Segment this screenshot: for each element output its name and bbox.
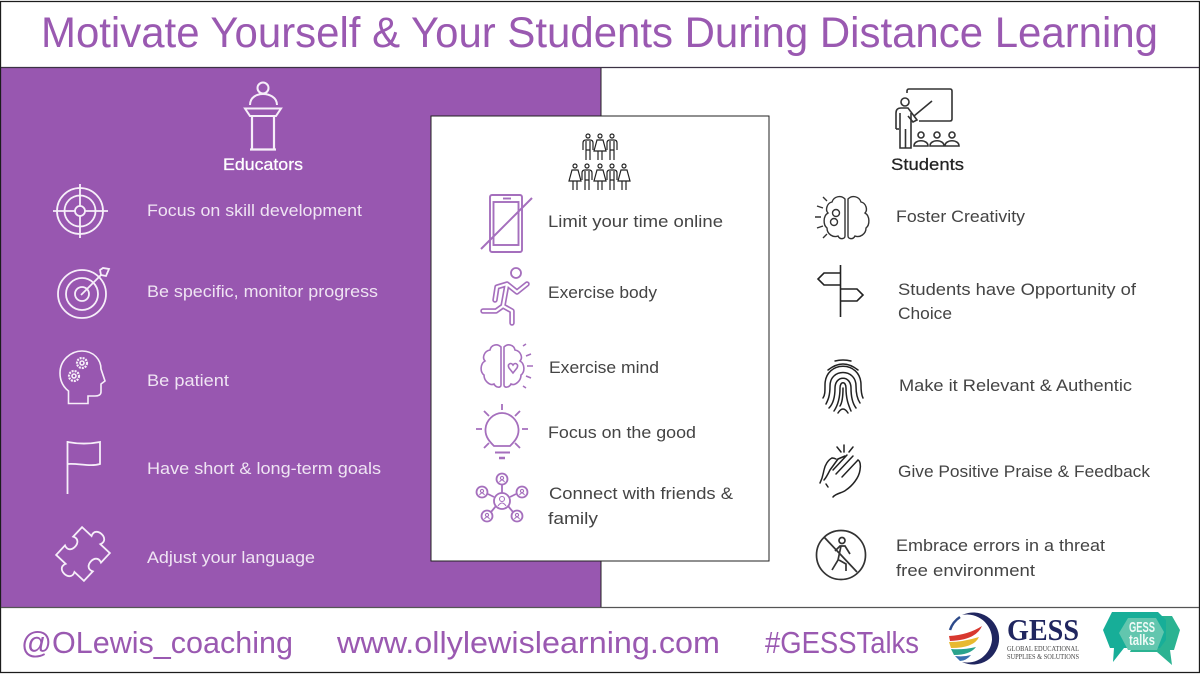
title: Motivate Yourself & Your Students During Distance Learning	[41, 9, 1158, 57]
icon: people network	[476, 474, 528, 522]
icon: light bulb	[476, 404, 528, 458]
text: embrace errors: Embrace errors in a threat	[896, 536, 1105, 555]
text: adjust your language: Adjust your language	[147, 548, 315, 567]
text: opportunity of choice	[898, 280, 1136, 323]
panel: wellbeing centre box	[431, 116, 769, 561]
text: goals: Have short & long-term goals	[147, 459, 381, 478]
logo: GESS talks	[1103, 612, 1180, 665]
text: foster creativity: Foster Creativity	[896, 207, 1026, 226]
text: embrace errors: free environment	[896, 561, 1035, 580]
icon: brain with gears	[815, 197, 869, 239]
footer links: @OLewis_coaching	[21, 625, 293, 660]
text: connect with friends	[548, 484, 734, 528]
panel: educators	[1, 68, 601, 608]
logo: GESS talks: GESS	[1129, 619, 1155, 636]
footer links: www.ollylewislearning.com	[336, 625, 720, 660]
text: connect with friends: family	[548, 509, 599, 528]
text: opportunity of choice: Choice	[898, 304, 952, 323]
icon: phone crossed out	[481, 195, 532, 252]
logo: GESS: SUPPLIES & SOLUTIONS	[1007, 653, 1079, 661]
logo: GESS: GESS	[1007, 612, 1079, 647]
text: exercise mind: Exercise mind	[549, 358, 659, 377]
heading: educators: Educators	[223, 156, 303, 174]
text: be specific: Be specific, monitor progress	[147, 282, 378, 301]
icon: signpost	[818, 265, 863, 317]
icon: runner	[483, 268, 527, 323]
text: exercise body: Exercise body	[548, 283, 658, 302]
icon: speaker at podium	[245, 82, 281, 150]
text: positive praise: Give Positive Praise & Feedback	[898, 462, 1151, 481]
logo: GESS talks: talks	[1129, 632, 1155, 649]
text: focus on skill development: Focus on skill development	[147, 201, 362, 220]
logo: GESS: GLOBAL EDUCATIONAL	[1007, 645, 1079, 653]
text: embrace errors	[896, 536, 1105, 580]
icon: flag	[68, 441, 100, 494]
text: focus on the good: Focus on the good	[548, 423, 696, 442]
text: be patient: Be patient	[147, 371, 229, 390]
logo: GESS	[949, 612, 1079, 664]
text: limit time online: Limit your time online	[548, 212, 723, 231]
icon: group of people	[569, 134, 630, 190]
icon: puzzle piece	[51, 521, 115, 587]
icon: teacher at board with students	[896, 89, 959, 148]
icon: dartboard with arrow	[58, 268, 109, 318]
icon: head with gears	[60, 351, 105, 404]
text: opportunity of choice: Students have Opportunity of	[898, 280, 1136, 299]
text: relevant and authentic: Make it Relevant & Authentic	[899, 376, 1133, 395]
panel: students	[815, 89, 1151, 580]
footer	[1, 608, 1199, 672]
icon: no walking sign	[816, 530, 866, 580]
icon: crosshair target	[53, 184, 108, 238]
icon: clapping hands	[820, 445, 860, 497]
icon: fingerprint	[823, 360, 863, 413]
footer links	[21, 625, 919, 660]
icon: brain with heart	[481, 344, 533, 388]
text: connect with friends: Connect with friends &	[549, 484, 734, 503]
heading: students: Students	[891, 156, 964, 174]
footer links: #GESSTalks	[765, 625, 919, 660]
